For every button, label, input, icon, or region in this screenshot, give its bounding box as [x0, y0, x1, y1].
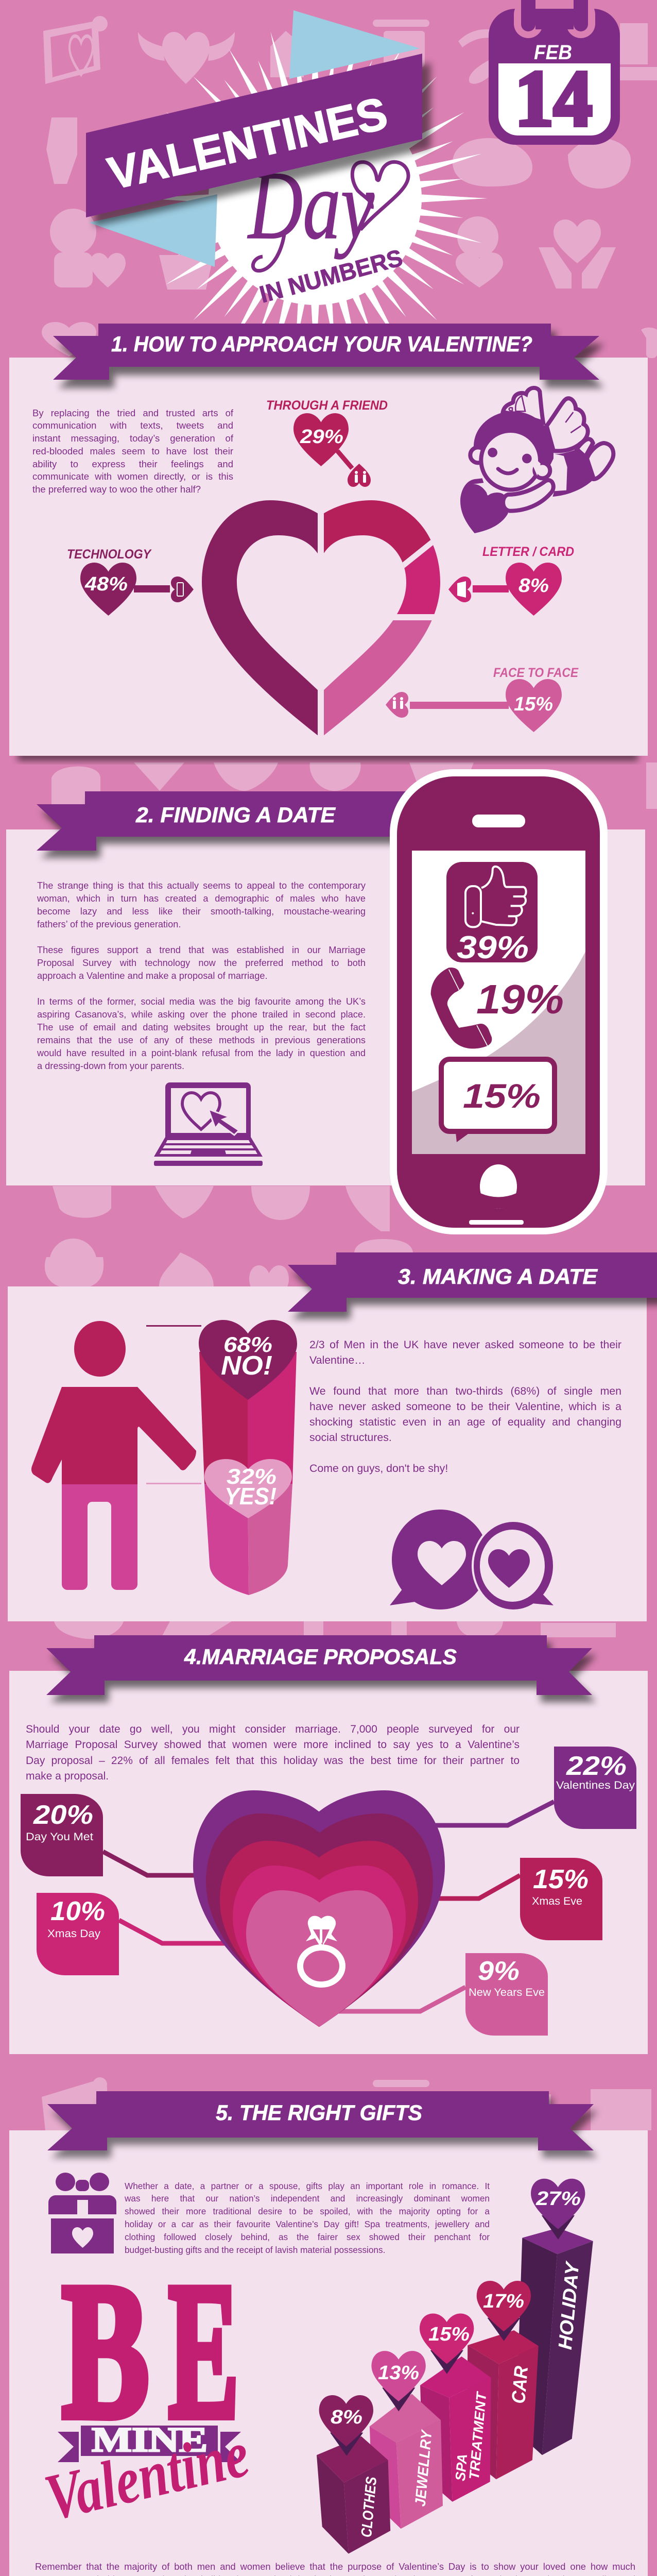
bar labels	[358, 2260, 583, 2538]
intro text 1: communicate with women directly, or is this	[32, 471, 233, 482]
bar labels: CLOTHES	[358, 2476, 380, 2538]
ribbon heading 3	[288, 1252, 657, 1319]
body text 2: remains that the use of any of these methods in previous generations	[37, 1035, 366, 1045]
panel: how to approach your valentine	[9, 324, 648, 756]
calendar icon: 14	[515, 54, 592, 143]
callout: valentines day 22%: 22%	[566, 1751, 627, 1781]
heart ring chart	[202, 500, 440, 736]
callout: new years eve 9%: New Years Eve	[469, 1987, 545, 1998]
body text 2: fathers’ of the previous generation.	[37, 919, 181, 929]
body text 2: These figures support a trend that was established in our Marriage	[37, 945, 366, 955]
callout: xmas day 10%: Xmas Day	[47, 1928, 101, 1940]
panel: the right gifts	[9, 2091, 648, 2576]
callout: letter card: 8%	[518, 575, 549, 597]
ribbon heading 1	[53, 324, 604, 388]
intro text 5: budget-busting gifts and the receipt of lavish material possessions.	[125, 2245, 385, 2255]
bar: clothes	[317, 2395, 390, 2554]
intro text 4: make a proposal.	[26, 1770, 109, 1782]
intro text 4: Marriage Proposal Survey showed that women were more inclined to say yes to a Valentine’s	[26, 1739, 520, 1751]
be mine valentine lettering	[38, 2243, 255, 2534]
intro text 1: the preferred way to woo the other half?	[32, 484, 201, 495]
intro text 4: Day proposal – 22% of all females felt that this holiday was the best time for their partner to	[26, 1755, 520, 1767]
callout: day you met 20%: Day You Met	[26, 1831, 93, 1843]
stat: 15% speech bubble	[441, 1059, 555, 1142]
icon: gift box	[48, 2173, 116, 2253]
stat: 68% no: 68%	[223, 1332, 272, 1357]
heart values	[331, 2188, 581, 2428]
callout: valentines day 22%: Valentines Day	[556, 1780, 635, 1791]
bar: spa treatment	[420, 2313, 491, 2502]
leader lines	[146, 1325, 201, 1484]
ribbon heading 1: 1. HOW TO APPROACH YOUR VALENTINE?	[111, 332, 532, 356]
stat: 19% telephone: 19%	[476, 976, 564, 1022]
stat: 68% no	[199, 1320, 297, 1400]
body text 2: aspiring Casanova’s, while asking over the phone trailed in second place.	[37, 1009, 366, 1020]
callout: valentines day 22%	[554, 1747, 636, 1829]
bar labels: CAR	[508, 2365, 532, 2404]
callout: xmas eve 15%: 15%	[533, 1865, 589, 1894]
ribbon heading 5: 5. THE RIGHT GIFTS	[216, 2100, 422, 2125]
stat: 68% no: NO!	[221, 1351, 272, 1381]
be mine valentine lettering: B	[62, 2243, 149, 2459]
body text 3: shocking statistic even in an age of equality and changing	[309, 1416, 621, 1428]
stat: 32% yes	[204, 1459, 292, 1518]
panel background	[6, 829, 645, 1185]
callout: technology: TECHNOLOGY	[67, 547, 152, 562]
panel: making a date	[8, 1252, 657, 1621]
body text 2	[37, 879, 367, 1075]
body text 2: The strange thing is that this actually seems to appeal to the contemporary	[37, 880, 366, 890]
body text 2: Proposal Survey with technology now the preferred method to both	[37, 958, 366, 968]
callout: xmas day 10%	[37, 1893, 119, 1975]
phone illustration	[390, 769, 608, 1234]
bar: holiday	[516, 2179, 593, 2455]
title ribbon: VALENTINES	[103, 88, 392, 199]
in numbers text: IN NUMBERS	[256, 244, 405, 308]
intro text 5	[125, 2180, 491, 2260]
panel: marriage proposals	[9, 1635, 648, 2054]
be mine valentine lettering: Valentine	[38, 2417, 255, 2534]
body text 2: would have resulted in a point-blank refusal from the lady in question and	[37, 1048, 366, 1058]
body text 3: social structures.	[309, 1431, 392, 1444]
callout: new years eve 9%	[465, 1953, 548, 2036]
intro text 4	[26, 1722, 521, 1786]
intro text 5: showed their more traditional desire to be spoiled, with the majority opting for a	[125, 2206, 490, 2216]
callout: new years eve 9%: 9%	[478, 1956, 520, 1986]
intro text 5: holiday or a car as their favourite Valentine’s Day gift! Spa treatments, jewellery and	[125, 2219, 490, 2229]
callout: technology: 48%	[84, 573, 128, 595]
intro text 4: Should your date go well, you might consider marriage. 7,000 people surveyed for our	[26, 1723, 520, 1735]
ribbon heading 2: 2. FINDING A DATE	[135, 803, 336, 827]
body text 3: 2/3 of Men in the UK have never asked someone to be their	[309, 1338, 621, 1351]
panel background	[9, 2130, 648, 2576]
intro text 1: instant messaging, today’s generation of	[32, 433, 233, 444]
calendar icon	[489, 0, 620, 145]
ribbon heading 3: 3. MAKING A DATE	[398, 1264, 598, 1289]
stat: 39% thumbs up: 39%	[457, 930, 529, 965]
callout: letter card: LETTER / CARD	[482, 545, 574, 559]
ribbon heading 4: 4.MARRIAGE PROPOSALS	[184, 1645, 457, 1669]
bar: jewellry	[370, 2351, 443, 2529]
stat: 32% yes: 32%	[227, 1464, 276, 1488]
panel background	[9, 358, 648, 756]
heart values: 13%	[378, 2362, 419, 2384]
person figure	[31, 1321, 196, 1590]
body text 3: We found that more than two-thirds (68%) of single men	[309, 1385, 621, 1397]
closing text: Remember that the majority of both men and women believe that the purpose of Valentine’s Day is to show your loved one how much	[35, 2561, 635, 2572]
stat: 32% yes: YES!	[224, 1483, 276, 1510]
body text 3: have never asked someone to be their Valentine, which is a	[309, 1400, 621, 1413]
panel: section 1 shadow	[18, 752, 638, 760]
heart values: 8%	[331, 2406, 362, 2428]
callout: technology	[67, 547, 194, 616]
panel background	[9, 1671, 648, 2054]
bar labels: JEWELLRY	[412, 2429, 436, 2507]
bar labels: SPA	[453, 2453, 470, 2482]
intro text 1: ability to express their feelings and	[32, 459, 233, 469]
proportion column	[199, 1320, 297, 1595]
icon: speech bubbles with hearts	[390, 1510, 555, 1612]
title ribbon	[86, 54, 430, 227]
icon: cupid	[460, 388, 613, 533]
intro text 5: was here that our nation’s independent and increasingly dominant women	[125, 2193, 490, 2204]
heart values: 27%	[535, 2188, 581, 2210]
body text 3: Valentine…	[309, 1354, 366, 1366]
panel background	[8, 1286, 647, 1621]
calendar icon: FEB	[534, 41, 572, 64]
body text 2: In terms of the former, social media was the big favourite among the UK’s	[37, 996, 366, 1007]
heart values: 17%	[483, 2291, 524, 2312]
stat: 19% telephone	[431, 968, 564, 1048]
callout: through a friend: THROUGH A FRIEND	[266, 398, 388, 413]
be mine valentine lettering: E	[168, 2243, 239, 2459]
callout: xmas eve 15%: Xmas Eve	[532, 1895, 582, 1907]
body text 3: Come on guys, don't be shy!	[309, 1462, 448, 1475]
ribbon heading 5	[47, 2091, 598, 2158]
callout: day you met 20%	[21, 1794, 103, 1876]
intro text 1: By replacing the tried and trusted arts of	[32, 407, 233, 418]
bar labels: HOLIDAY	[555, 2260, 583, 2350]
be mine valentine lettering: MINE	[92, 2420, 208, 2459]
intro text 5: clothing followed closely behind, as the fairer sex showed their penchant for	[125, 2232, 490, 2242]
callout: face to face: FACE TO FACE	[493, 666, 579, 680]
icon: laptop with heart	[154, 1082, 263, 1166]
layered heart chart	[193, 1790, 445, 2027]
body text 2: become lazy and less like their smooth-talking, moustache-wearing	[37, 906, 366, 917]
callout: through a friend	[266, 398, 388, 487]
stat: 15% speech bubble: 15%	[463, 1077, 541, 1115]
heart values: 15%	[428, 2324, 470, 2345]
icon: engagement ring	[300, 1916, 342, 1985]
callout: face to face: 15%	[514, 693, 553, 715]
starburst	[135, 19, 495, 378]
callout: through a friend: 29%	[300, 426, 343, 448]
bar labels: TREATMENT	[466, 2391, 490, 2480]
panel: finding a date	[6, 769, 645, 1234]
intro text 1: red-blooded males seem to have lost their	[32, 446, 233, 456]
ribbon heading 2	[37, 791, 407, 858]
body text 3	[309, 1337, 623, 1481]
callout: letter card	[448, 545, 574, 616]
body text 2: a dressing-down from your parents.	[37, 1061, 184, 1071]
body text 2: woman, which in turn has created a demographic of males who have	[37, 893, 366, 904]
ribbon blue tails	[89, 10, 420, 267]
title block	[86, 10, 495, 378]
intro text 1	[32, 407, 234, 500]
callout: day you met 20%: 20%	[33, 1800, 93, 1830]
intro text 5: Whether a date, a partner or a spouse, gifts play an important role in romance. It	[125, 2181, 490, 2191]
bar: car	[467, 2281, 539, 2479]
callout: xmas eve 15%	[520, 1858, 602, 1940]
callout: xmas day 10%: 10%	[50, 1896, 105, 1926]
stat: 39% thumbs up	[446, 862, 538, 965]
3d bar chart	[317, 2179, 593, 2554]
body text 2: The use of email and dating websites brought up the rear, but the fact	[37, 1022, 366, 1032]
ribbon heading 4	[46, 1635, 596, 1702]
script word Day: Day	[247, 151, 375, 260]
callout: face to face	[386, 666, 579, 732]
connector lines	[103, 1802, 554, 2011]
closing text	[35, 2560, 636, 2576]
intro text 1: communication with texts, tweets and	[32, 420, 233, 431]
body text 2: approach a Valentine and make a proposal of marriage.	[37, 971, 268, 981]
